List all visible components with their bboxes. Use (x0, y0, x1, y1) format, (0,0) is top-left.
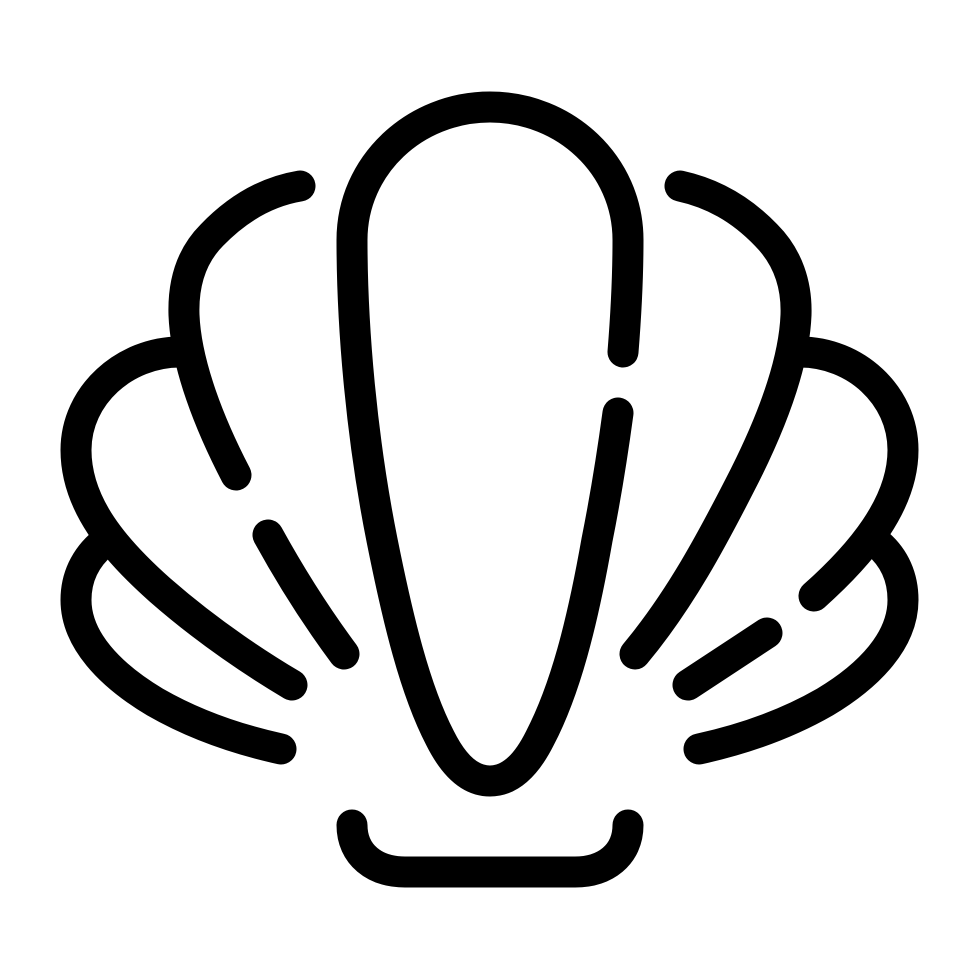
upper left rib (184, 186, 300, 475)
shell base (352, 825, 628, 872)
central shell segment (352, 107, 628, 781)
upper right rib (635, 186, 796, 654)
inner left rib (268, 535, 344, 654)
lower right lobe (699, 543, 903, 749)
lower left lobe (76, 543, 281, 749)
middle right lobe (800, 352, 903, 596)
inner right rib (688, 633, 767, 685)
middle left lobe (76, 352, 292, 685)
